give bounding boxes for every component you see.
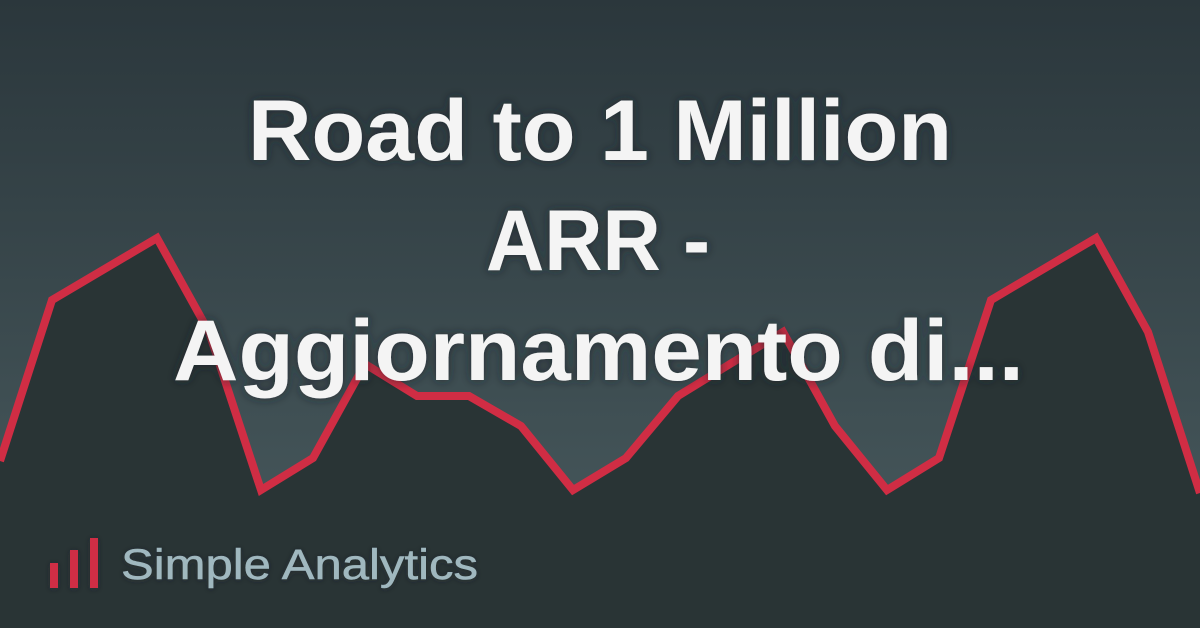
title: ARR - (486, 193, 710, 289)
icon: bar chart logo (50, 538, 98, 588)
brand name: Simple Analytics (121, 541, 478, 589)
title: Aggiornamento di... (173, 303, 1024, 399)
red line chart (0, 238, 1200, 493)
title (173, 83, 1024, 399)
area under line chart (0, 238, 1200, 628)
logo: Simple Analytics (50, 538, 478, 589)
title: Road to 1 Million (248, 83, 952, 179)
